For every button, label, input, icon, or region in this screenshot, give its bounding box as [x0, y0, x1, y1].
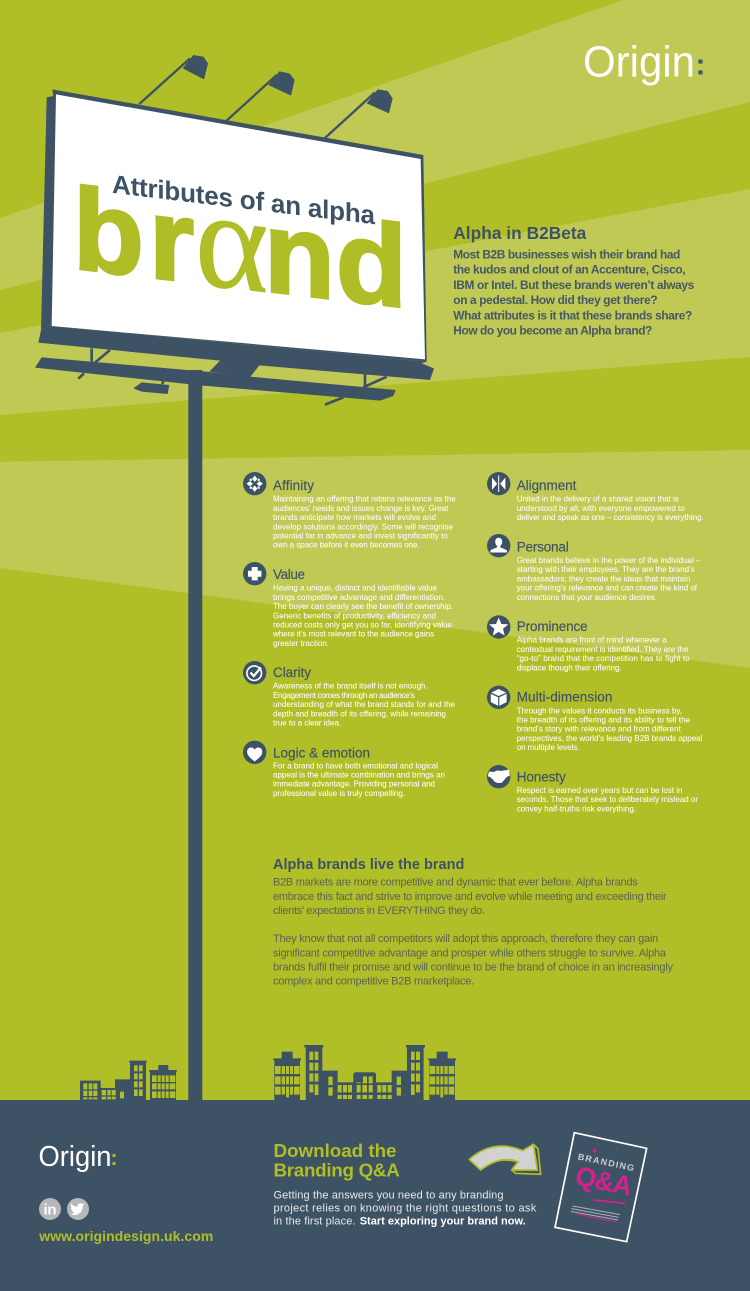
intro text: Alpha in B2Beta: IBM or Intel. But these brands weren’t always	[453, 278, 695, 292]
icon: person	[487, 534, 510, 557]
intro text: Alpha in B2Beta: Alpha in B2Beta	[453, 223, 587, 243]
intro text: Alpha in B2Beta: What attributes is it that these brands share?	[453, 308, 692, 322]
platform	[38, 326, 434, 380]
attribute: Value	[243, 562, 453, 648]
download text: Start exploring your brand now.	[360, 1215, 526, 1227]
billboard frame	[41, 89, 427, 362]
lamp 2	[227, 71, 295, 121]
attribute: Alignment: understood by all, with everyone empowered to	[517, 504, 685, 513]
icon: check	[243, 661, 266, 684]
attribute: Personal: Great brands believe in the power of the individual –	[517, 556, 701, 565]
attribute: Affinity: own a space before it even becomes one.	[273, 541, 420, 550]
brochure cover	[555, 1133, 647, 1242]
intro text: Alpha in B2Beta: on a pedestal. How did they get there?	[453, 293, 658, 307]
download heading	[274, 1140, 400, 1181]
attribute: Honesty: Honesty	[517, 769, 566, 784]
icon: plus	[243, 562, 266, 585]
attribute: Affinity: Maintaining an offering that retains relevance as the	[273, 495, 456, 504]
section: Alpha brands live the brand: B2B markets are more competitive and dynamic that ever before. Alpha brands	[273, 877, 638, 889]
download text: in the first place.	[274, 1215, 356, 1227]
attribute: Value: Generic benefits of productivity, efficiency and	[273, 611, 436, 620]
attribute: Affinity: potential far in advance and invest significantly to	[273, 532, 448, 540]
logo: Origin footer: :	[110, 1147, 118, 1170]
attribute: Logic & emotion	[243, 741, 445, 798]
attribute: Affinity: audiences’ needs and issues change is key. Great	[273, 504, 449, 513]
attribute: Clarity: Clarity	[273, 665, 311, 680]
attribute: Affinity: Affinity	[273, 478, 314, 493]
attribute: Multi-dimension: the breadth of its offering and its ability to tell the	[517, 716, 691, 724]
download heading: Download the	[274, 1140, 396, 1161]
icon: star	[487, 615, 510, 639]
billboard word: brand: r	[149, 173, 194, 307]
intro text: Alpha in B2Beta: How do you become an Alpha brand?	[453, 324, 652, 338]
billboard title: Attributes of an alpha: Attributes of an alpha	[112, 169, 375, 230]
section: Alpha brands live the brand: embrace this fact and strive to improve and evolve while meeting and exceeding their	[273, 891, 667, 903]
attribute: Alignment: Alignment	[517, 478, 577, 493]
attribute: Clarity: true to a clear idea.	[273, 718, 341, 728]
website url: www.origindesign.uk.com	[38, 1228, 213, 1244]
attribute: Multi-dimension: perspectives, the world’s leading B2B brands appeal	[517, 734, 703, 743]
attribute: Multi-dimension: brand’s story with relevance and from different	[517, 725, 681, 734]
attribute: Clarity: depth and breadth of its offering, while remaining	[273, 709, 446, 718]
attribute: Multi-dimension: Through the values it conducts its business by,	[517, 706, 682, 715]
attribute: Clarity: understanding of what the brand stands for and the	[273, 700, 456, 709]
section: Alpha brands live the brand: Alpha brands live the brand	[273, 857, 464, 873]
section: Alpha brands live the brand: brands fulfil their promise and will continue to be the brand of choice in an increasingly	[273, 961, 674, 973]
billboard word: brand: b	[73, 164, 144, 301]
skyline: left	[80, 1061, 177, 1100]
lamp 3	[325, 89, 393, 138]
attribute: Personal: your offering’s relevance and can create the kind of	[517, 584, 698, 593]
section: Alpha brands live the brand	[273, 857, 674, 987]
attribute: Prominence: contextual requirement is identified. They are the	[517, 645, 689, 654]
attribute: Honesty: convey half-truths risk everything.	[517, 804, 636, 813]
attribute: Prominence: “go-to” brand that the competition has to fight to	[517, 654, 690, 663]
download heading: Branding Q&A	[274, 1160, 400, 1181]
icon: handshake	[487, 765, 510, 788]
attribute: Affinity: develop solutions accordingly. Some will recognise	[273, 522, 454, 531]
logo: Origin top right: :	[696, 48, 706, 82]
intro text: Alpha in B2Beta: the kudos and clout of an Accenture, Cisco,	[453, 263, 686, 277]
attribute: Multi-dimension	[487, 686, 703, 752]
billboard word: brand	[73, 146, 407, 340]
attribute: Personal: ambassadors; they create the ideas that maintain	[517, 574, 690, 583]
section: Alpha brands live the brand: significant competitive advantage and prosper while others struggle to survive. Alpha	[273, 947, 667, 959]
section: Alpha brands live the brand: They know that not all competitors will adopt this approach, therefore they can gain	[273, 933, 658, 945]
attribute: Logic & emotion: Logic & emotion	[273, 745, 370, 760]
attribute: Clarity: Engagement comes through an audience’s	[273, 691, 415, 700]
attribute: Multi-dimension: Multi-dimension	[517, 689, 612, 704]
icon: alignment	[487, 472, 510, 495]
billboard pole	[188, 370, 202, 1102]
attribute: Value: Value	[273, 567, 305, 582]
billboard word: brand: α	[195, 160, 268, 323]
attribute: Value: brings competitive advantage and differentiation.	[273, 593, 445, 602]
skyline: centre	[273, 1045, 456, 1102]
attribute: Honesty	[487, 765, 698, 813]
download text: project relies on knowing the right questions to ask	[274, 1203, 537, 1215]
attribute: Logic & emotion: immediate advantage. Providing personal and	[273, 780, 435, 789]
icon: heart	[243, 741, 266, 764]
attribute: Affinity: brands anticipate how markets will evolve and	[273, 513, 436, 522]
attribute: Prominence	[487, 615, 690, 672]
icon: linkedin: in	[44, 1202, 56, 1218]
billboard word: brand: n	[264, 186, 335, 324]
lamp 1	[139, 55, 208, 104]
icon: cube	[487, 686, 510, 709]
lower beam	[35, 348, 396, 405]
attribute: Logic & emotion: professional value is truly compelling.	[273, 789, 405, 798]
attribute: Value: where it’s most relevant to the audience gains	[272, 630, 434, 639]
download text: Getting the answers you need to any branding	[274, 1189, 504, 1201]
attribute: Value: reduced costs only get you so far, identifying value	[273, 620, 453, 630]
section: Alpha brands live the brand: clients’ expectations in EVERYTHING they do.	[273, 905, 485, 917]
attribute: Affinity	[243, 472, 456, 550]
billboard word: brand: d	[336, 195, 407, 333]
intro text: Alpha in B2Beta	[453, 223, 695, 338]
attribute: Logic & emotion: appeal is the ultimate combination and brings an	[273, 770, 445, 780]
brochure Q&A: Q&A	[573, 1161, 635, 1202]
download text	[274, 1189, 537, 1227]
attribute: Clarity: Awareness of the brand itself is not enough.	[273, 682, 428, 691]
attribute: Personal: Personal	[517, 539, 569, 554]
attribute: Logic & emotion: For a brand to have both emotional and logical	[273, 761, 438, 770]
arrow	[469, 1144, 541, 1174]
attribute: Personal: starting with their employees. They are the brand’s	[517, 565, 695, 574]
section: Alpha brands live the brand: complex and competitive B2B marketplace.	[273, 975, 474, 987]
icon: linkedin	[39, 1198, 61, 1220]
attribute: Multi-dimension: on multiple levels.	[517, 743, 579, 752]
intro text: Alpha in B2Beta: Most B2B businesses wish their brand had	[453, 247, 680, 261]
logo: Origin footer: Origin	[38, 1141, 112, 1173]
attribute: Value: greater traction.	[273, 639, 329, 648]
attribute: Honesty: seconds. Those that seek to deliberately mislead or	[517, 795, 698, 804]
attribute: Prominence: displace though their offering.	[517, 663, 622, 672]
attribute: Personal	[487, 534, 701, 602]
attribute: Value: The buyer can clearly see the benefit of ownership.	[273, 602, 453, 611]
icon: twitter	[67, 1198, 89, 1220]
attribute: Prominence: Prominence	[517, 619, 588, 634]
footer band	[0, 1100, 750, 1291]
attribute: Clarity	[243, 661, 456, 728]
billboard	[35, 55, 434, 405]
icon: affinity	[243, 472, 266, 495]
attribute: Alignment: United in the delivery of a shared vision that is	[517, 495, 679, 504]
attribute: Prominence: Alpha brands are front of mind whenever a	[517, 636, 667, 645]
attribute: Value: Having a unique, distinct and identifiable value	[273, 584, 438, 593]
attribute: Personal: connections that your audience desires.	[517, 593, 657, 602]
brochure title: BRANDING	[577, 1152, 635, 1173]
attribute: Alignment: deliver and speak as one – consistency is everything.	[517, 513, 704, 522]
attribute: Alignment	[487, 472, 704, 522]
attribute: Honesty: Respect is earned over years but can be lost in	[517, 786, 682, 795]
logo: Origin top right: Origin	[583, 38, 695, 86]
